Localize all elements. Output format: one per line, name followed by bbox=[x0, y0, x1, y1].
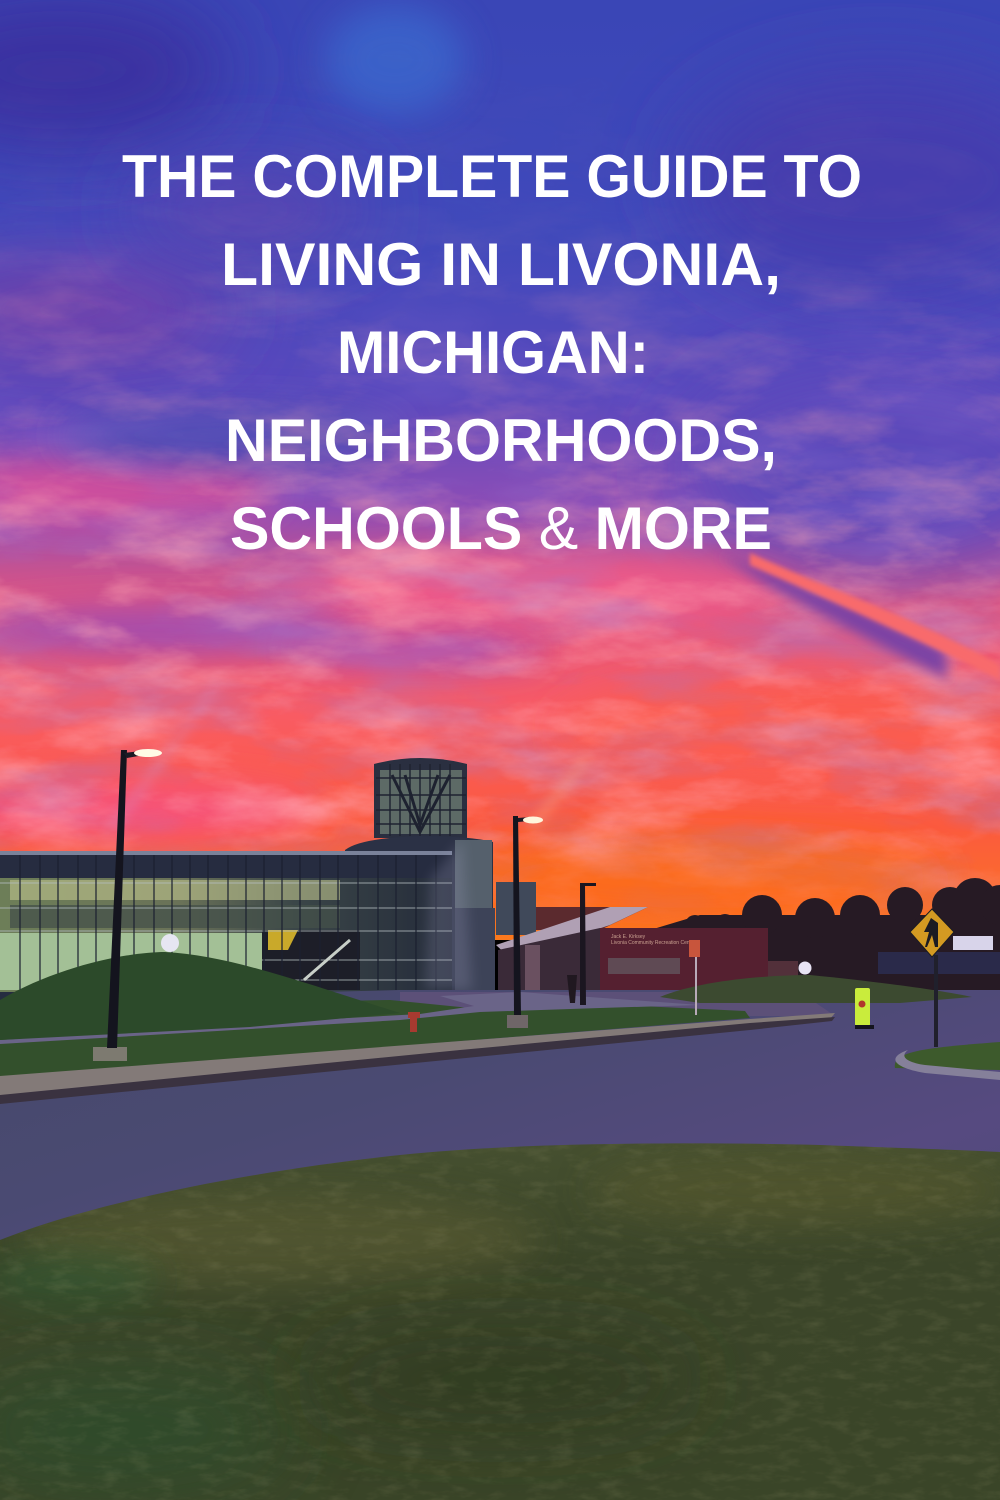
title: NEIGHBORHOODS, bbox=[225, 407, 777, 474]
ground: lawn, mound and paved walk bbox=[0, 952, 972, 1104]
stadium fence and sign bbox=[878, 936, 1000, 974]
road bbox=[0, 990, 1000, 1300]
title: THE COMPLETE GUIDE TO bbox=[122, 143, 862, 210]
street lamp small bbox=[580, 883, 596, 1005]
pedestrian crossing sign bbox=[910, 909, 954, 1047]
white globe lights bbox=[161, 934, 812, 974]
foreground lawn bbox=[0, 1140, 1000, 1500]
building: entrance and recreation center: Livonia Community Recreation Center bbox=[611, 940, 696, 946]
street lamp centre bbox=[507, 816, 543, 1028]
building: entrance and recreation center bbox=[496, 882, 798, 992]
lime pedestrian bollard bbox=[855, 988, 874, 1029]
fire hydrant bbox=[408, 1012, 420, 1032]
street lamp left bbox=[93, 749, 162, 1061]
title: SCHOOLS & MORE bbox=[230, 495, 772, 562]
road island with curb bbox=[895, 1042, 1000, 1080]
title: LIVING IN LIVONIA, bbox=[221, 231, 781, 298]
tree line bbox=[650, 878, 1000, 990]
title bbox=[122, 143, 862, 562]
building: entrance and recreation center: Jack E. Kirksey bbox=[611, 934, 646, 940]
building: main glass hall bbox=[0, 836, 495, 1000]
lens flare rays bbox=[105, 680, 222, 830]
building: tower bbox=[374, 758, 467, 838]
background photo: sunset sky bbox=[0, 0, 1000, 940]
person walking bbox=[567, 975, 577, 1003]
orange sign post bbox=[689, 940, 700, 1015]
purple streak cloud bbox=[720, 555, 948, 680]
title: MICHIGAN: bbox=[337, 319, 649, 386]
